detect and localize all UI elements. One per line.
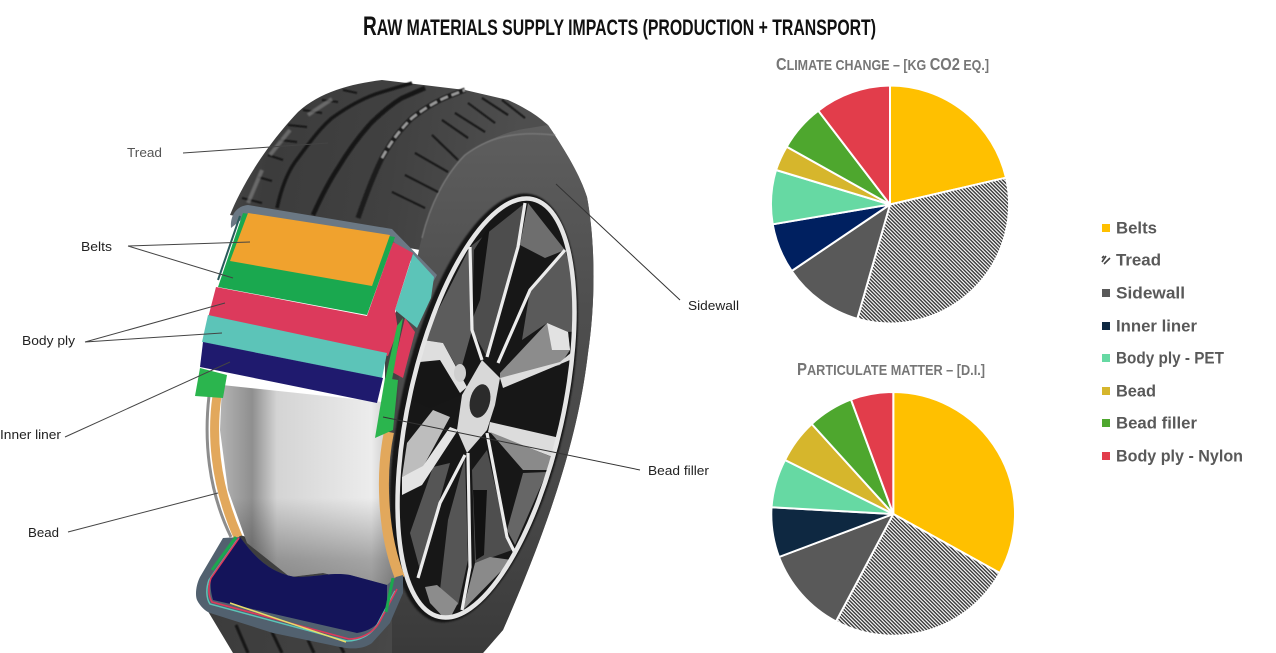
hub [454,364,493,420]
tire illustration [0,80,739,653]
bead filler: right [375,378,398,438]
legend: belts: Belts [1116,220,1157,238]
sidewall [392,125,594,653]
bottom tread [236,625,344,653]
tread lugs [242,90,525,208]
sidewall label [556,184,739,313]
layer: belt green [218,213,395,315]
left ply edge [218,216,240,280]
bead filler: left [195,368,227,398]
tread highlights [248,99,332,203]
tread grooves [277,83,555,238]
bead: left [215,396,238,537]
bead: right [384,432,400,578]
layer: body ply nylon [208,242,413,356]
sidewall label: Sidewall [688,298,739,313]
tire edge [207,396,231,537]
legend: body ply PET: Body ply - PET [1116,350,1224,368]
layer: belt orange [230,213,390,286]
bead label [28,493,218,540]
rim interior [220,385,398,590]
layer: body ply nylon side tab [392,318,415,378]
rim ring [364,182,608,634]
legend: bead: Bead [1116,382,1156,400]
bead filler strip [385,318,403,380]
chart title: particulate matter: PARTICULATE MATTER – [D.I.] [797,359,985,379]
bead filler label [383,417,710,478]
legend: body ply nylon: Body ply - Nylon [1116,448,1243,466]
belts label: Belts [81,239,113,254]
wheel [395,196,577,620]
bead label: Bead [28,525,59,540]
spoke edges [418,203,565,610]
pie chart: climate change [771,85,1009,323]
legend: inner liner: Inner liner [1116,318,1198,336]
chart title: climate change: CLIMATE CHANGE – [KG CO2 EQ.] [776,54,989,74]
cut section [196,537,403,648]
rim opening [363,181,609,635]
layer: inner liner [200,342,383,403]
tread label: Tread [127,145,162,160]
inner liner label [0,362,230,442]
legend [1102,220,1243,466]
legend: bead filler: Bead filler [1116,414,1198,432]
spokes [402,203,572,616]
tire body [197,80,594,653]
belts label [81,239,250,278]
body ply label [22,303,225,348]
body ply label: Body ply [22,333,76,348]
title: RAW MATERIALS SUPPLY IMPACTS (PRODUCTION + TRANSPORT) [363,11,876,41]
legend: sidewall: Sidewall [1116,284,1185,302]
bead filler label: Bead filler [648,463,710,478]
legend: tread: Tread [1116,252,1161,270]
layer: body ply teal [202,315,387,378]
inner liner label: Inner liner [0,427,62,442]
layer: body ply PET side [395,254,434,328]
pie chart: particulate matter [771,392,1015,636]
tread cross section edge [231,205,437,284]
tread label [127,143,328,160]
sidewall shadow around rim [355,176,613,640]
